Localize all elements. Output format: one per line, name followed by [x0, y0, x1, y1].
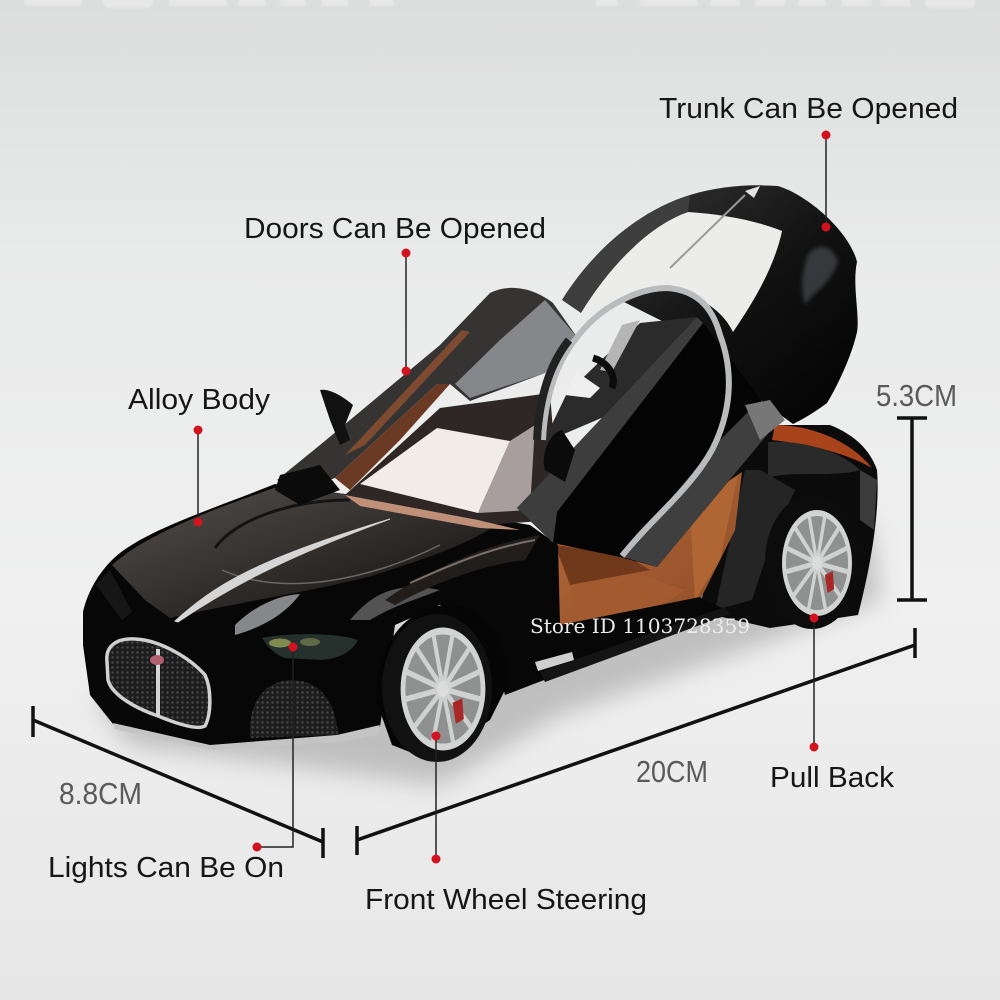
watermark: store id: Store ID 1103728359 [530, 614, 750, 638]
dimension: height 5.3CM [876, 378, 957, 600]
interior seats [555, 472, 742, 630]
bonnet chrome line [175, 519, 390, 622]
dimension: width 8.8CM [33, 706, 323, 858]
callout: front wheel steering: Front Wheel Steering [365, 884, 647, 916]
lower intake mesh [250, 680, 338, 738]
side mirror [320, 390, 353, 445]
callout: alloy body: Alloy Body [128, 384, 271, 416]
near door raised [517, 288, 785, 567]
trunk lid raised [562, 185, 858, 424]
trunk glass [581, 212, 782, 332]
dimension: width 8.8CM: 8.8CM [59, 776, 142, 811]
floor shadow [95, 520, 880, 785]
callout: trunk can be opened: Trunk Can Be Opened [659, 93, 958, 125]
callout: front wheel steering [365, 732, 647, 916]
headlight [262, 634, 358, 660]
far door raised [275, 288, 577, 505]
front wheel [376, 605, 506, 762]
side sill chrome [535, 652, 574, 671]
grille [107, 639, 210, 727]
callout: doors can be opened [244, 213, 546, 376]
faded heading remnants at top edge [24, 0, 975, 8]
dimension: length 20CM: 20CM [636, 754, 708, 789]
front splitter [113, 723, 380, 750]
dimension: height 5.3CM: 5.3CM [876, 378, 957, 413]
rear body with orange spoiler [700, 425, 878, 628]
callout: alloy body [128, 384, 271, 526]
callout: pull back [770, 614, 895, 794]
model car [83, 185, 878, 762]
callout: lights can be on [48, 642, 298, 884]
callout: lights can be on: Lights Can Be On [48, 852, 284, 884]
dimension: length 20CM [357, 628, 915, 855]
view through near door arch [543, 317, 697, 443]
callout: doors can be opened: Doors Can Be Opened [244, 213, 546, 245]
windshield [345, 393, 560, 530]
main body and bonnet [83, 484, 730, 750]
rear wheel [765, 495, 859, 629]
callout: pull back: Pull Back [770, 762, 895, 794]
callout: trunk can be opened [659, 93, 958, 232]
